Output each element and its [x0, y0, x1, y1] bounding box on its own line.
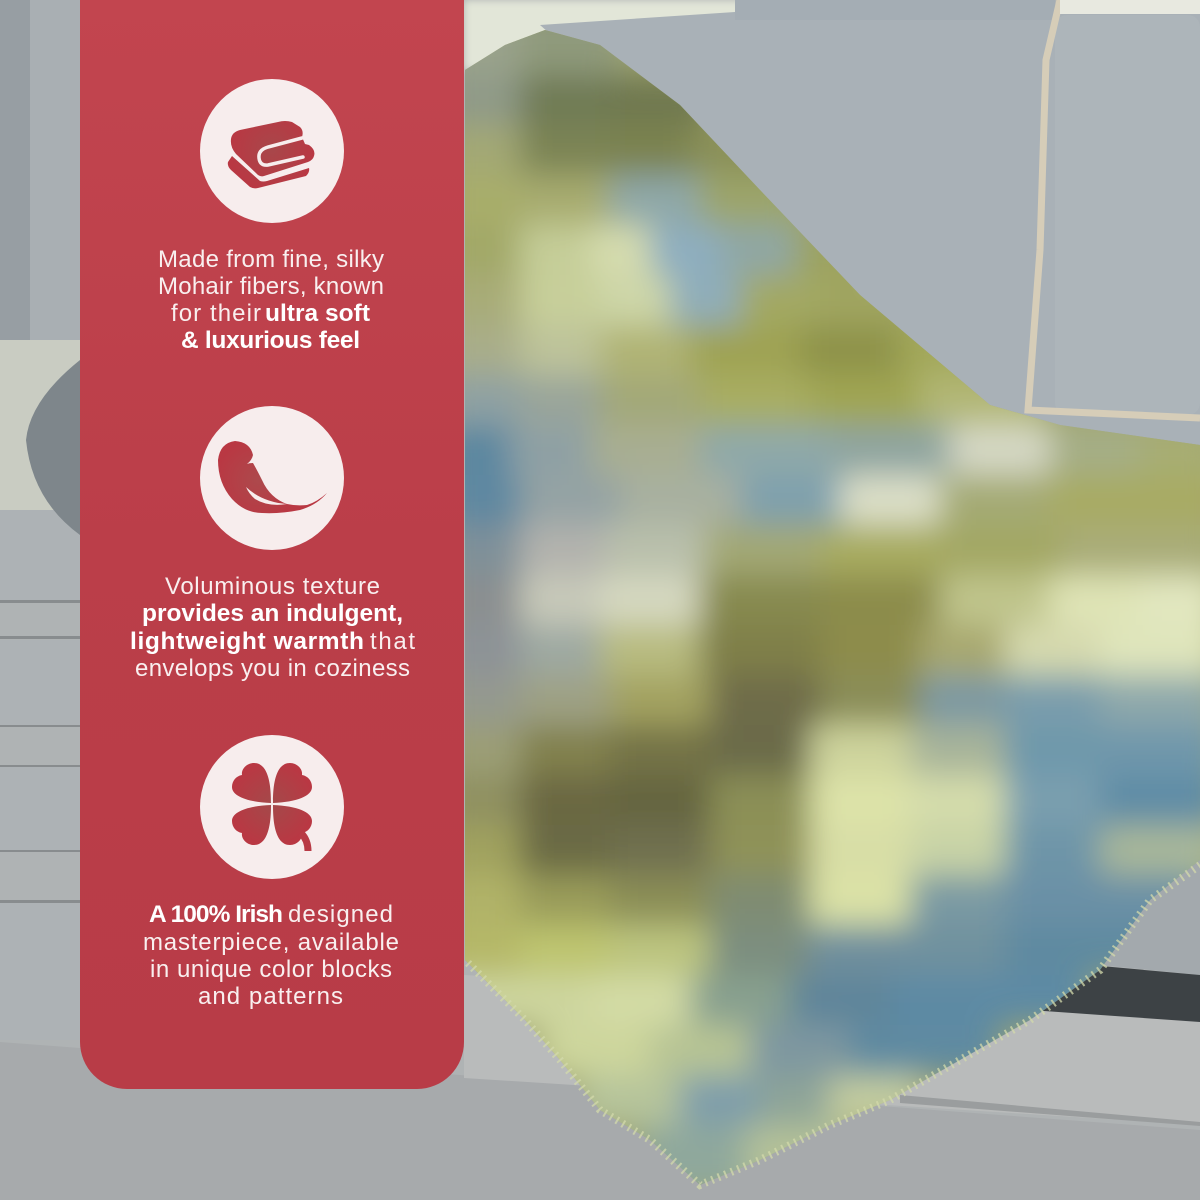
- text: mohair description: Mohair fibers, known: [158, 273, 384, 300]
- text: mohair description: [158, 246, 384, 354]
- icon: four-leaf clover: [200, 735, 344, 879]
- blanket fringe: [465, 865, 1200, 1185]
- text: Irish design description: and patterns: [198, 983, 343, 1010]
- text: mohair description: Made from fine, silky: [158, 246, 384, 273]
- text: Irish design description: masterpiece, available: [143, 929, 399, 956]
- text: Irish design description: in unique color blocks: [150, 956, 392, 983]
- text: warmth description: [130, 573, 415, 682]
- feature 2: warmth: [130, 406, 415, 682]
- text: Irish design description: [143, 901, 399, 1010]
- icon: folded blanket: [200, 79, 344, 223]
- text: mohair description: for their: [171, 300, 261, 327]
- text: mohair description: & luxurious feel: [181, 327, 360, 354]
- text: warmth description: Voluminous texture: [165, 573, 380, 600]
- text: warmth description: that: [370, 628, 415, 655]
- feature 1: soft mohair: [158, 79, 384, 354]
- text: warmth description: provides an indulgent,: [142, 600, 403, 627]
- feature 3: Irish design: [143, 735, 399, 1010]
- blanket: plaid throw: [440, 0, 1200, 1200]
- text: mohair description: ultra soft: [265, 300, 370, 327]
- text: Irish design description: designed: [288, 901, 393, 928]
- text: warmth description: lightweight warmth: [130, 628, 364, 655]
- text: Irish design description: A 100% Irish: [149, 901, 283, 928]
- text: warmth description: envelops you in coziness: [135, 655, 410, 682]
- icon: feather: [200, 406, 344, 550]
- panel: features: [80, 0, 464, 1089]
